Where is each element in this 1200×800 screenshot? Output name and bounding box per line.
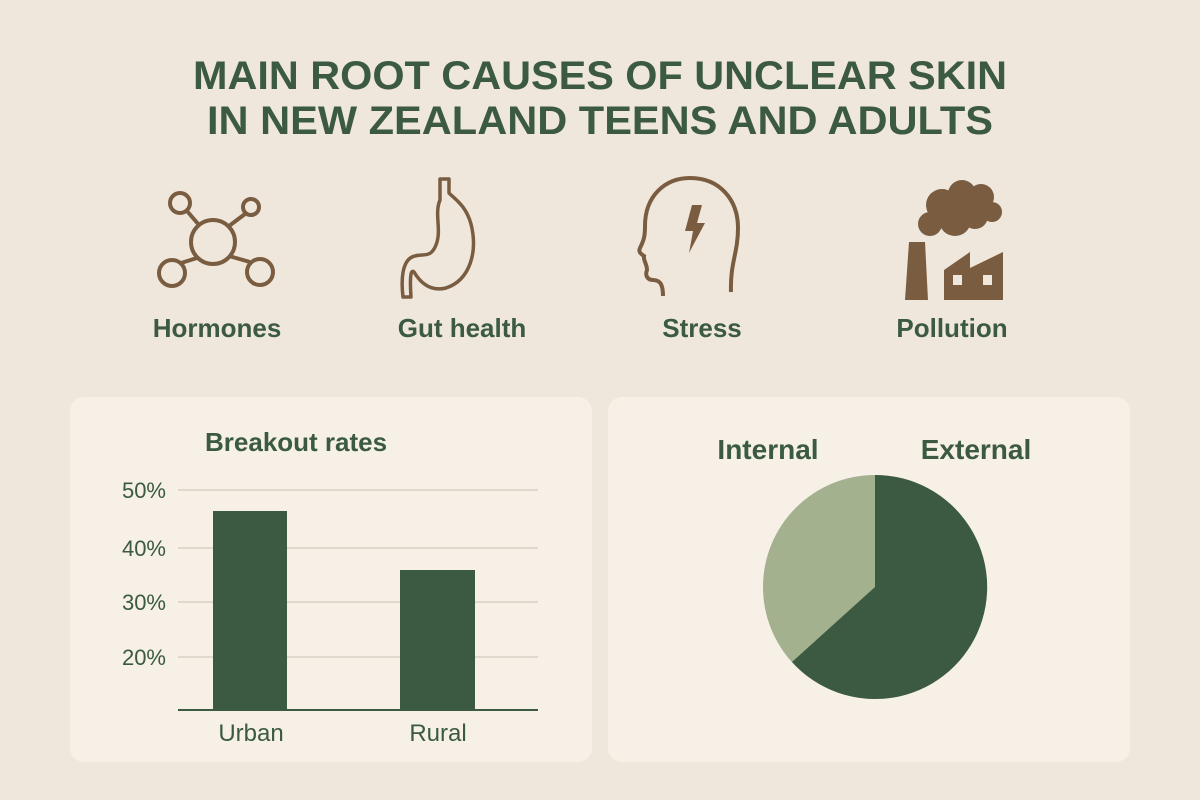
y axis labels (122, 478, 166, 670)
panel: pie chart (608, 397, 1130, 762)
panel: pie chart: Internal (717, 434, 819, 465)
panel: bar chart (70, 397, 592, 762)
icon labels: Gut health (398, 313, 526, 343)
panel: bar chart: Rural (409, 720, 467, 747)
title: IN NEW ZEALAND TEENS AND ADULTS (207, 99, 993, 143)
icon: stomach (402, 179, 473, 297)
icon labels: Pollution (896, 313, 1008, 343)
icon labels: Stress (662, 313, 742, 343)
icon: head with lightning (639, 178, 738, 296)
bars (213, 511, 287, 710)
y axis labels: 40% (122, 536, 166, 561)
chart title: Breakout rates (205, 427, 387, 457)
icon: hormones (159, 193, 273, 286)
icon labels: Hormones (153, 313, 281, 343)
panel: bar chart: Urban (218, 720, 284, 747)
panel: pie chart: External (921, 434, 1031, 465)
title: MAIN ROOT CAUSES OF UNCLEAR SKIN (193, 54, 1007, 98)
icon: factory pollution (905, 180, 1003, 300)
y axis labels: 50% (122, 478, 166, 503)
y axis labels: 20% (122, 645, 166, 670)
y axis labels: 30% (122, 590, 166, 615)
icon labels (153, 313, 1008, 343)
title (193, 54, 1007, 143)
